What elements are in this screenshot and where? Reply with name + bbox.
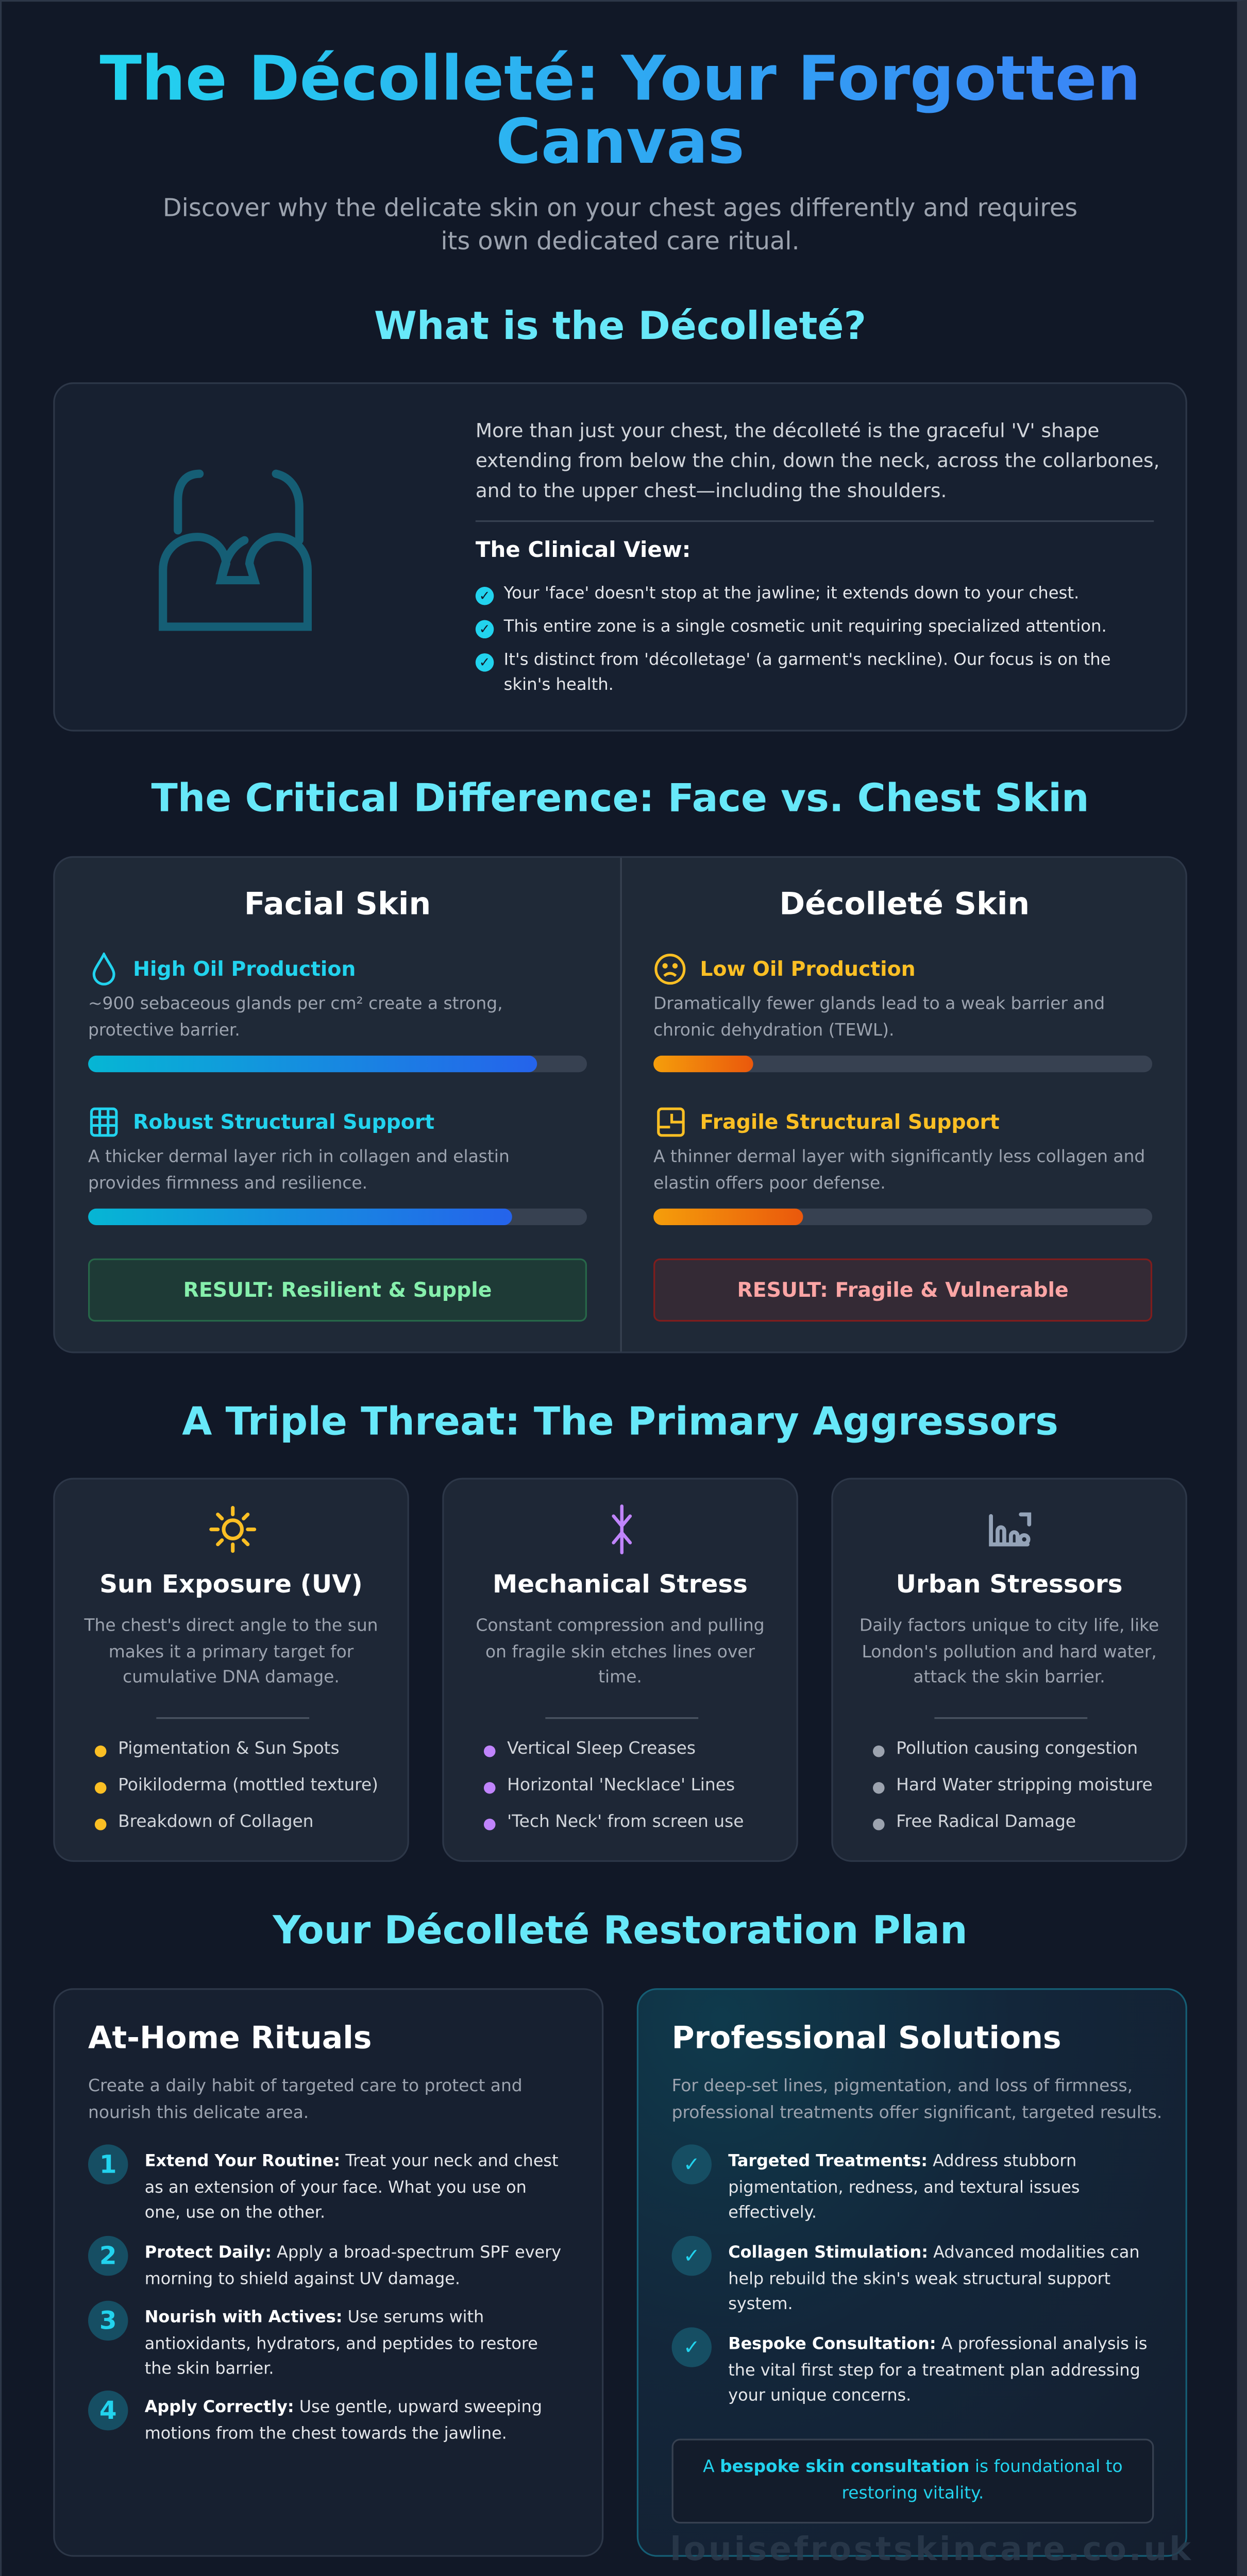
step 4: Apply Correctly: Use gentle, upward sweeping motions from the chest towards the jawline. [145,2399,542,2443]
result: resilient: RESULT: Resilient & Supple [183,1278,492,1301]
card: mechanical [442,1478,798,1862]
step 1: Extend Your Routine: Treat your neck and chest as an extension of your face. What you use on one, use on the other. [145,2153,559,2223]
result: resilient [88,1259,587,1321]
icon: sun [209,1506,257,1553]
card: sun [53,1478,409,1862]
icon: sad face [654,954,685,985]
icon: factory [989,1513,1032,1547]
card: urban [831,1478,1187,1862]
column: facial skin: ~900 sebaceous glands per cm² create a strong, protective barrier. [88,996,503,1040]
bullet list: clinical view [475,585,1111,695]
panel: professional: Professional Solutions [672,2022,1061,2056]
card: sun: Poikiloderma (mottled texture) [118,1777,378,1795]
result: fragile: RESULT: Fragile & Vulnerable [737,1278,1069,1301]
panel: professional [637,1988,1187,2557]
step 3: Nourish with Actives: Use serums with antioxidants, hydrators, and peptides to restore the skin barrier. [145,2309,538,2379]
card: sun: Sun Exposure (UV) [99,1569,363,1599]
heading: what is: What is the Décolleté? [374,304,866,349]
column: decollete skin [653,888,1152,1322]
column: facial skin: A thicker dermal layer rich in collagen and elastin provides firmness and resilience. [88,1149,510,1193]
card: mechanical: Constant compression and pulling on fragile skin etches lines over time. [476,1618,765,1687]
column: decollete skin: Low Oil Production [700,958,916,981]
title: Canvas [496,107,745,178]
panel: professional: For deep-set lines, pigmentation, and loss of firmness, professional treatments offer significant, targeted results. [672,2078,1162,2122]
bullet list: clinical view: It's distinct from 'décolletage' (a garment's neckline). Our focus is on the skin's health. [504,652,1111,695]
heading: restoration plan: Your Décolleté Restoration Plan [273,1908,968,1953]
title: The Décolleté: Your Forgotten [99,43,1141,115]
card: urban: Pollution causing congestion [896,1740,1138,1759]
title [99,43,1141,178]
panel: at-home [53,1988,603,2557]
step 2: 2 [99,2241,117,2271]
bullet list: clinical view: ✓ [479,588,490,603]
icon: decollete [159,470,312,631]
card: sun: The chest's direct angle to the sun makes it a primary target for cumulative DNA damage. [84,1618,378,1687]
step 1: 1 [99,2149,117,2179]
panel: threats [53,1478,1187,1862]
column: decollete skin: A thinner dermal layer with significantly less collagen and elastin offers poor defense. [653,1149,1145,1193]
card: mechanical: Mechanical Stress [493,1569,748,1599]
panel: comparison [53,856,1187,1353]
bar: high oil [88,1056,587,1072]
subtitle: its own dedicated care ritual. [441,228,800,256]
icon: compress arrows [612,1504,632,1554]
card: urban: Hard Water stripping moisture [896,1777,1153,1795]
column: decollete skin: Fragile Structural Support [700,1110,1000,1134]
card: urban: Urban Stressors [896,1569,1123,1599]
panel: at-home: Create a daily habit of targeted care to protect and nourish this delicate area. [88,2078,523,2122]
card: urban: Free Radical Damage [896,1814,1076,1832]
icon: grid [90,1108,117,1137]
bullet list: clinical view: Your 'face' doesn't stop at the jawline; it extends down to your chest. [504,585,1079,603]
subtitle [163,195,1077,256]
panel: at-home: At-Home Rituals [88,2022,372,2056]
step 4: 4 [99,2396,117,2426]
callout: A bespoke skin consultation is foundational to restoring vitality. [703,2459,1123,2503]
bar: fragile [653,1209,1152,1225]
card: mechanical: 'Tech Neck' from screen use [507,1814,744,1832]
icon: fragile [657,1108,685,1137]
heading: triple threat: A Triple Threat: The Primary Aggressors [182,1400,1058,1445]
card: sun: Pigmentation & Sun Spots [118,1740,340,1759]
bar: structure [88,1209,587,1225]
card: mechanical: Horizontal 'Necklace' Lines [507,1777,735,1795]
watermark: louisefrostskincare.co.uk [670,2530,1193,2568]
callout [672,2439,1154,2523]
column: decollete skin: Décolleté Skin [779,888,1030,923]
column: facial skin: Robust Structural Support [133,1110,434,1134]
icon: drop [93,952,115,986]
bullet list: clinical view: This entire zone is a single cosmetic unit requiring specialized attention. [504,618,1107,637]
bullet list: clinical view: ✓ [479,622,490,637]
panel: definition [53,382,1187,732]
heading: critical difference: The Critical Difference: Face vs. Chest Skin [151,776,1089,821]
solution 1: Targeted Treatments: Address stubborn pigmentation, redness, and textural issues effectively. [728,2153,1080,2223]
column: facial skin [88,888,587,1322]
bar: low oil [653,1056,1152,1072]
result: fragile [653,1259,1152,1321]
subtitle: Discover why the delicate skin on your chest ages differently and requires [163,195,1077,223]
column: decollete skin: Dramatically fewer glands lead to a weak barrier and chronic dehydration (TEWL). [653,996,1105,1040]
solution 3: ✓ [683,2335,700,2359]
card: sun: Breakdown of Collagen [118,1814,314,1832]
solution 2: ✓ [683,2244,700,2267]
solution 1: ✓ [683,2153,700,2176]
card: mechanical: Vertical Sleep Creases [507,1740,696,1759]
card: urban: Daily factors unique to city life, like London's pollution and hard water, attack the skin barrier. [860,1618,1159,1687]
solution 3: Bespoke Consultation: A professional analysis is the vital first step for a treatment plan addressing your unique concerns. [728,2335,1147,2405]
column: facial skin: Facial Skin [244,888,431,923]
bullet list: clinical view: ✓ [479,655,490,670]
step 3: 3 [99,2306,117,2335]
column: facial skin: High Oil Production [133,958,356,981]
text: definition: More than just your chest, the décolleté is the graceful 'V' shape extending from below the chin, down the neck, across the collarbones, and to the upper chest—including the shoulders. [476,419,1159,502]
solution 2: Collagen Stimulation: Advanced modalities can help rebuild the skin's weak structural support system. [728,2244,1140,2314]
step 2: Protect Daily: Apply a broad-spectrum SPF every morning to shield against UV damage. [145,2244,561,2289]
subheading: clinical view: The Clinical View: [476,538,690,564]
